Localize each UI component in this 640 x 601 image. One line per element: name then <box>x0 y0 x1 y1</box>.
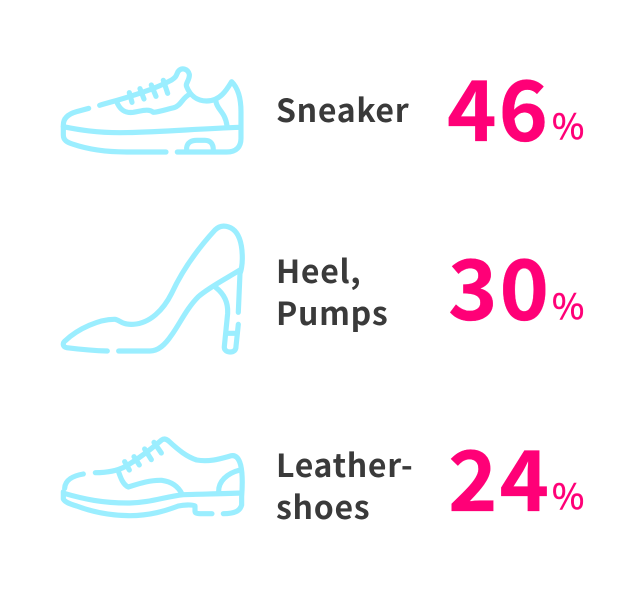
label: Heel, Pumps <box>276 247 388 335</box>
label: Heel, Pumps: Heel, <box>276 247 361 293</box>
label: Sneaker: Sneaker <box>276 86 409 132</box>
icon: leather shoe <box>63 439 242 516</box>
label: Leather-shoes <box>276 441 413 529</box>
value: 24%: 24 <box>448 415 551 536</box>
value: 30%: % <box>552 279 584 330</box>
value: 24%: % <box>552 469 584 520</box>
value: 46%: % <box>552 99 584 150</box>
icon: sneaker <box>63 69 241 152</box>
label: Heel, Pumps: Pumps <box>276 289 388 335</box>
label: Leather-shoes: shoes <box>276 483 370 529</box>
icon: high heel pump <box>63 226 242 352</box>
value: 46%: 46 <box>447 45 550 166</box>
value: 30%: 30 <box>448 224 551 345</box>
label: Leather-shoes: Leather- <box>276 441 413 487</box>
